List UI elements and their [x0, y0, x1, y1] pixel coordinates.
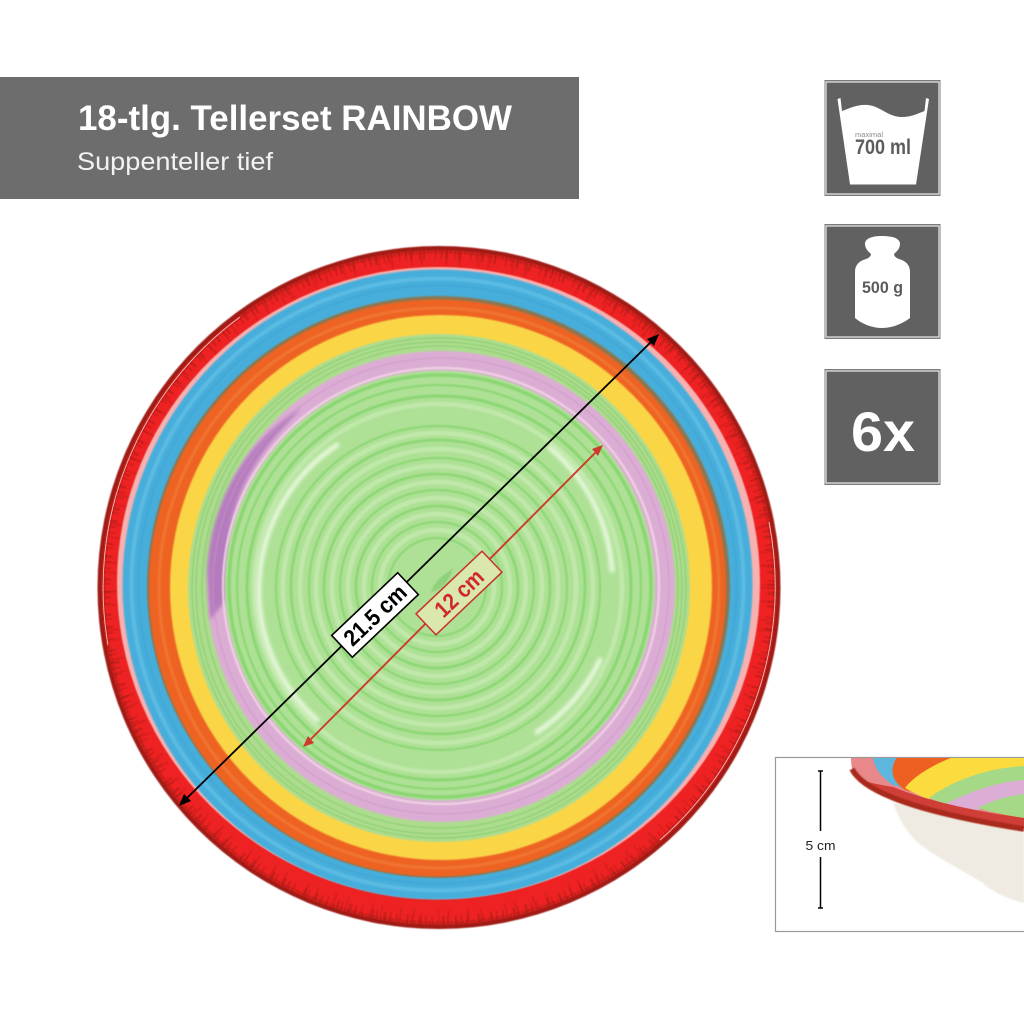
icon: capacity 700 ml: 700 ml: [855, 136, 911, 159]
inner green: [977, 794, 1024, 818]
label: 12 cm: [416, 551, 502, 635]
yellow band: [905, 757, 1024, 799]
label: 12 cm: 12 cm: [429, 564, 489, 622]
arrow: 12 cm inner diameter: [303, 445, 603, 747]
title: 18-tlg. Tellerset RAINBOW: [78, 99, 512, 138]
rim: [98, 246, 780, 929]
blue band: [873, 758, 902, 788]
icon: weight 500 g: 500 g: [862, 278, 903, 297]
rim surface: [851, 758, 1008, 816]
red lip: [852, 769, 1024, 829]
arrow: 21.5 cm diameter: [179, 334, 659, 806]
pale ring: [117, 267, 760, 899]
icon: weight 500 g: [824, 224, 940, 339]
bowl body: [893, 803, 1024, 903]
icon: quantity 6x: 6x: [851, 400, 915, 463]
icon: capacity 700 ml: maximal: [855, 130, 883, 139]
centre mark: [431, 568, 453, 592]
lilac band: [207, 351, 675, 822]
height label: 5 cm: [806, 838, 836, 853]
height bar: [818, 771, 823, 908]
title banner: [0, 77, 579, 199]
subtitle: Suppenteller tief: [77, 148, 273, 176]
red rim band: [858, 780, 1024, 828]
plate well: [225, 370, 655, 800]
icon: capacity 700 ml: [824, 80, 940, 196]
label: 21.5 cm: 21.5 cm: [338, 579, 412, 651]
light highlights: [259, 445, 612, 732]
outer green band: [188, 334, 690, 842]
rim highlight: [103, 317, 775, 840]
orange band: [147, 296, 730, 878]
panel: side view: [776, 757, 1024, 932]
blue band: [122, 270, 752, 900]
icon: quantity 6x: [824, 369, 940, 485]
green band: [929, 766, 1024, 804]
orange band: [892, 757, 1024, 820]
plate top view: [98, 246, 780, 929]
lilac band: [945, 780, 1024, 810]
yellow band: [170, 315, 712, 860]
